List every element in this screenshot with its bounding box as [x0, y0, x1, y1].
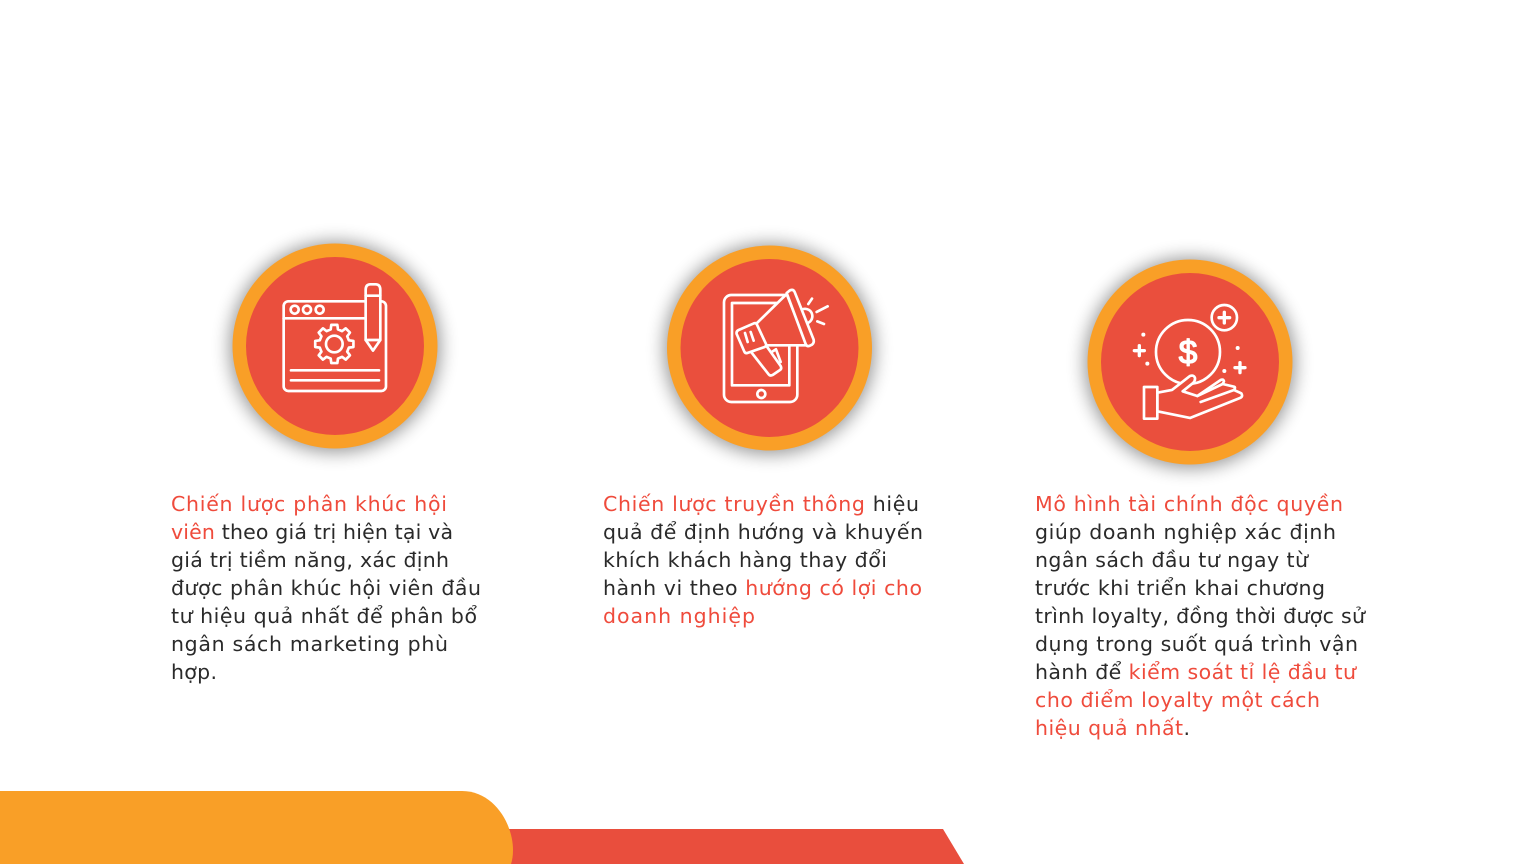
- text block: financial model description: dụng trong suốt quá trình vận: [1035, 632, 1358, 656]
- decorative footer: red band: [500, 829, 964, 864]
- text block: communication description: quả để định hướng và khuyến: [603, 520, 923, 544]
- text block: financial model description: hành để kiểm soát tỉ lệ đầu tư: [1035, 660, 1357, 684]
- icon: tablet with megaphone: [664, 244, 874, 454]
- text block: financial model description: Mô hình tài chính độc quyền: [1035, 492, 1343, 516]
- text block: communication description: doanh nghiệp: [603, 604, 755, 628]
- text block: segmentation description: Chiến lược phân khúc hội: [171, 492, 447, 516]
- panel: communication strategy: [603, 244, 923, 628]
- text block: communication description: khích khách hàng thay đổi: [603, 548, 887, 572]
- text block: communication description: Chiến lược truyền thông hiệu: [603, 492, 919, 516]
- text block: financial model description: cho điểm loyalty một cách: [1035, 688, 1320, 712]
- text block: segmentation description: ngân sách marketing phù: [171, 632, 448, 656]
- icon: hand holding dollar coin: $: [1179, 335, 1197, 372]
- text block: segmentation description: hợp.: [171, 660, 217, 684]
- icon: window with gear and pencil: [230, 242, 440, 452]
- text block: financial model description: trình loyalty, đồng thời được sử: [1035, 604, 1366, 628]
- text block: segmentation description: tư hiệu quả nhất để phân bổ: [171, 604, 477, 628]
- panel: customer segmentation strategy: [171, 242, 481, 684]
- decorative footer: orange tab: [0, 791, 513, 864]
- panel: exclusive financial model: [1035, 258, 1366, 740]
- text block: financial model description: trước khi triển khai chương: [1035, 576, 1325, 600]
- text block: communication description: [603, 492, 923, 628]
- text block: segmentation description: được phân khúc hội viên đầu: [171, 576, 481, 600]
- text block: financial model description: hiệu quả nhất.: [1035, 716, 1190, 740]
- icon: hand holding dollar coin: [1085, 258, 1295, 468]
- text block: segmentation description: viên theo giá trị hiện tại và: [171, 520, 453, 544]
- text block: financial model description: ngân sách đầu tư ngay từ: [1035, 548, 1309, 572]
- text block: segmentation description: giá trị tiềm năng, xác định: [171, 548, 449, 572]
- text block: communication description: hành vi theo hướng có lợi cho: [603, 576, 922, 600]
- text block: financial model description: [1035, 492, 1366, 740]
- text block: financial model description: giúp doanh nghiệp xác định: [1035, 520, 1336, 544]
- text block: segmentation description: [171, 492, 481, 684]
